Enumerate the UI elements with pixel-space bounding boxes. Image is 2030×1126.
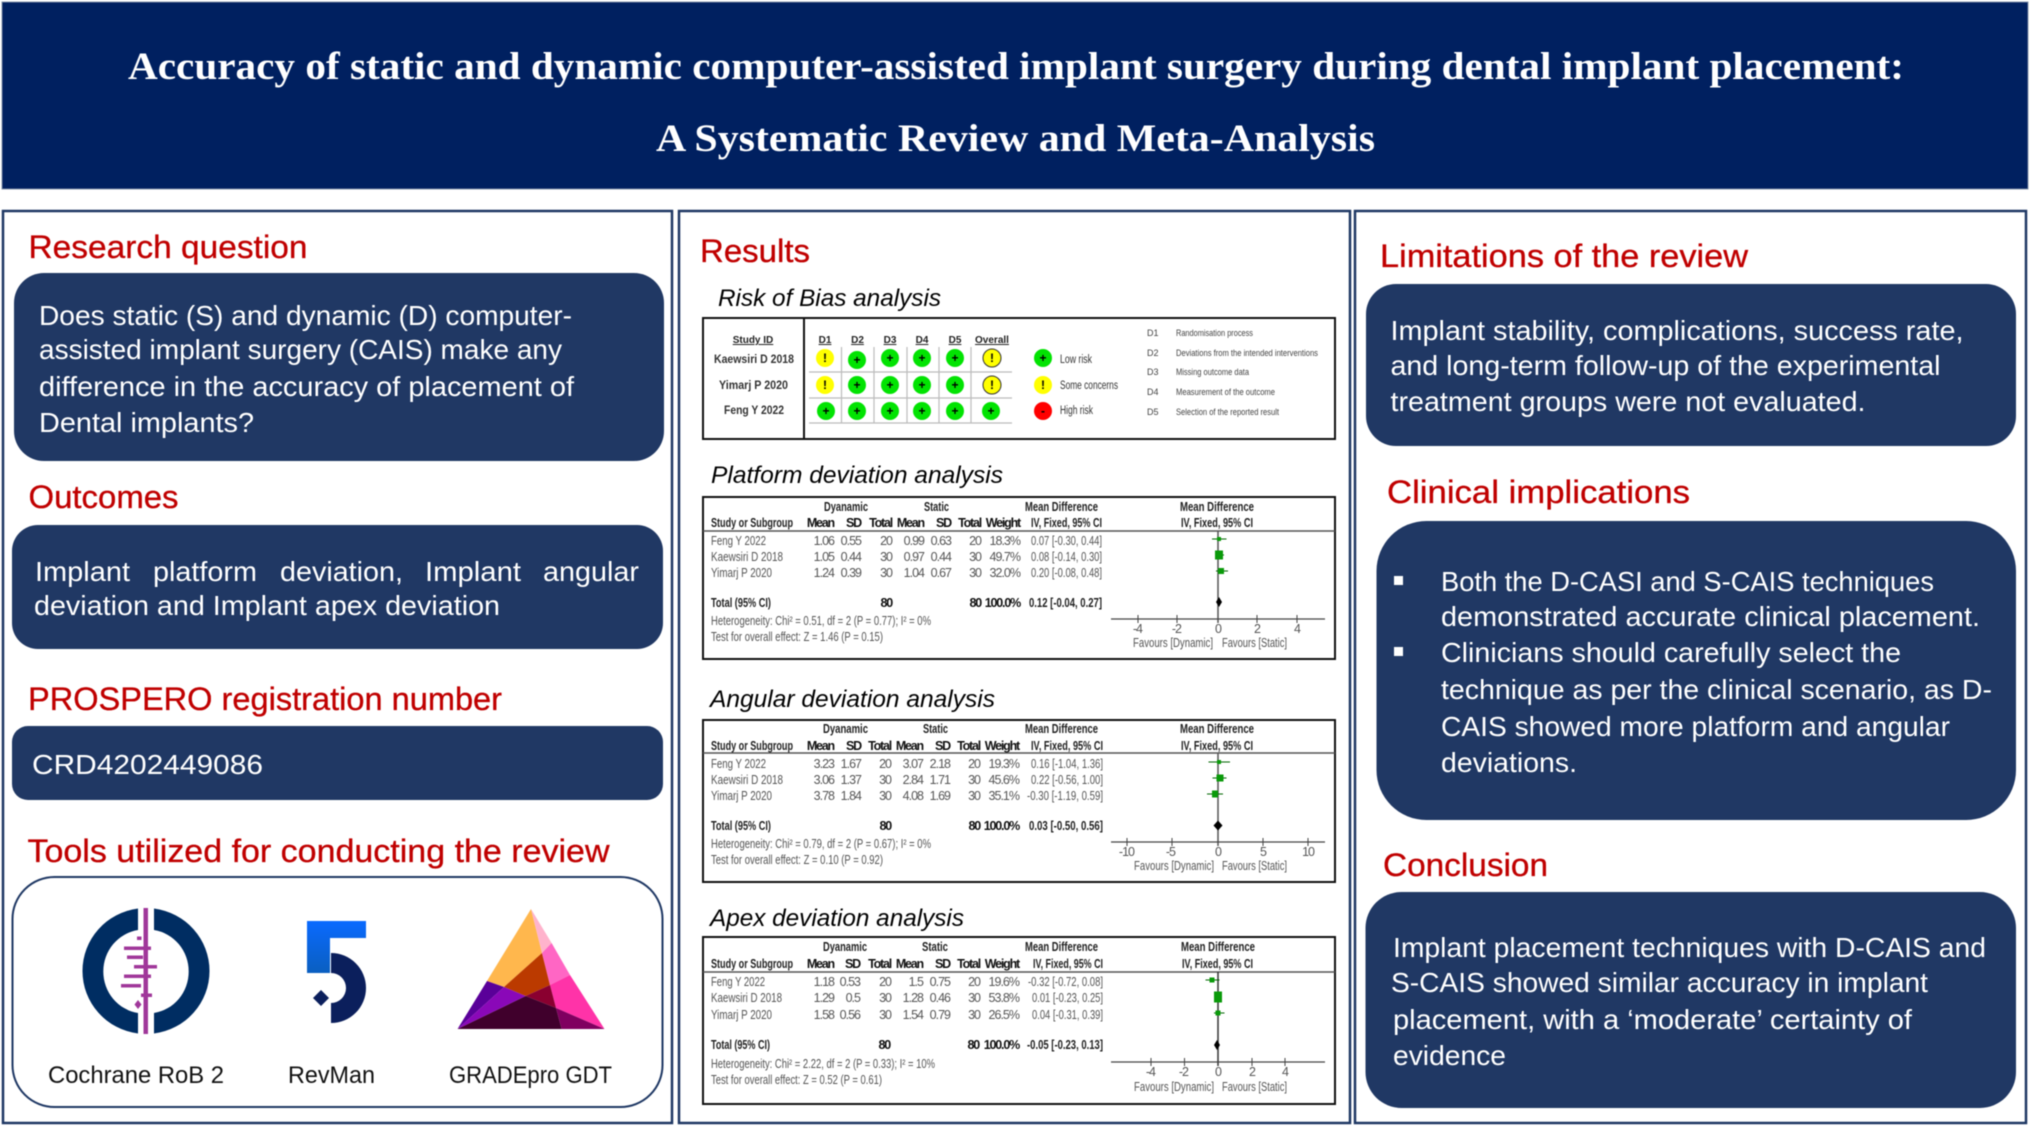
table rows: 1.71	[930, 773, 951, 787]
risk of bias chart: D2	[851, 335, 864, 346]
risk of bias: kaewsiri row: !	[990, 351, 994, 365]
table header: Static	[922, 940, 948, 954]
table rows: 20	[968, 975, 981, 989]
outcomes box: deviation and Implant apex deviation	[34, 590, 500, 621]
table header	[711, 940, 1255, 971]
limitations box	[1366, 284, 2016, 446]
domain legend: Randomisation process	[1176, 328, 1253, 338]
plot: Favours [Dynamic]	[1134, 1080, 1214, 1094]
risk of bias: feng row: +	[886, 404, 894, 418]
table header: Total	[958, 516, 982, 530]
table rows: 0.97	[904, 550, 925, 564]
conclusion box: Implant placement techniques with D-CAIS and	[1393, 932, 1986, 963]
title line 1: Accuracy of static and dynamic computer-assisted implant surgery during dental implant placement:	[128, 45, 1904, 88]
table rows: 1.28	[903, 991, 924, 1005]
table rows: Yimarj P 2020	[711, 1008, 772, 1022]
table rows: 80	[967, 1038, 980, 1052]
heading: outcomes: Outcomes	[28, 479, 178, 515]
domain legend: D4	[1147, 387, 1159, 397]
risk legend: -	[1041, 404, 1045, 418]
table rows: 32.0%	[990, 566, 1021, 580]
table rows: 1.54	[903, 1008, 924, 1022]
table rows: 19.6%	[989, 975, 1020, 989]
header banner	[2, 2, 2028, 189]
table rows: 0.07 [-0.30, 0.44]	[1031, 534, 1102, 548]
table header: Dyanamic	[823, 722, 868, 736]
table rows: 0.63	[931, 534, 952, 548]
table rows: Kaewsiri D 2018	[711, 991, 782, 1005]
table rows: 3.06	[814, 773, 835, 787]
table header: Mean Difference	[1025, 940, 1098, 954]
table header: Total	[957, 739, 981, 753]
bullet 1: Both the D-CASI and S-CAIS techniques	[1441, 566, 1934, 597]
table header: SD	[846, 516, 862, 530]
plot: 0	[1215, 622, 1222, 636]
table rows: Feng Y 2022	[711, 975, 765, 989]
risk of bias: yimarj row: !	[823, 378, 827, 392]
table rows: 1.58	[814, 1008, 835, 1022]
table rows: 30	[880, 550, 893, 564]
outcomes box: Implant	[425, 556, 521, 587]
domain legend: D5	[1147, 407, 1159, 417]
risk legend: Some concerns	[1060, 380, 1118, 392]
plot: Favours [Dynamic]	[1134, 859, 1214, 873]
domain legend: Deviations from the intended interventions	[1176, 348, 1318, 358]
table rows: Heterogeneity: Chi² = 0.51, df = 2 (P = 0.77); I² = 0%	[711, 614, 931, 628]
table rows: 30	[968, 991, 981, 1005]
table rows: Yimarj P 2020	[711, 566, 772, 580]
table rows	[711, 757, 1103, 867]
table header: Total	[868, 957, 892, 971]
table rows: 0.46	[930, 991, 951, 1005]
panel: left column	[3, 211, 672, 1123]
plot: Favours [Dynamic]	[1133, 636, 1213, 650]
forest plot: platform deviation	[703, 497, 1335, 659]
heading: research question: Research question	[28, 229, 308, 265]
table rows: 1.84	[841, 789, 862, 803]
table rows: Kaewsiri D 2018	[711, 550, 783, 564]
table rows: 0.44	[931, 550, 952, 564]
risk legend	[1034, 349, 1118, 420]
research question box: assisted implant surgery (CAIS) make any	[39, 334, 562, 365]
table header: Study or Subgroup	[711, 957, 793, 971]
table header: Mean	[896, 957, 924, 971]
risk of bias: yimarj row: +	[918, 378, 926, 392]
table rows: 45.6%	[989, 773, 1020, 787]
risk of bias: yimarj row: !	[990, 378, 994, 392]
limitations box: and long-term follow-up of the experimental	[1390, 350, 1940, 381]
risk of bias: kaewsiri row: +	[886, 351, 894, 365]
table header: IV, Fixed, 95% CI	[1181, 516, 1253, 530]
tools box	[12, 877, 662, 1107]
panel: results	[679, 211, 1350, 1123]
table rows: 4.08	[903, 789, 924, 803]
table header: SD	[845, 957, 861, 971]
risk of bias: feng row: +	[853, 404, 861, 418]
plot: 4	[1282, 1065, 1289, 1079]
table header: Mean	[807, 516, 835, 530]
bullet 1: demonstrated accurate clinical placement.	[1441, 601, 1980, 632]
outcomes box: Implant	[35, 556, 130, 587]
table rows: 30	[879, 1008, 892, 1022]
risk of bias: yimarj row: +	[886, 378, 894, 392]
bullet 2: technique as per the clinical scenario, as D-	[1441, 674, 1992, 705]
icon: cochrane rob 2 logo	[82, 908, 210, 1034]
table header: Mean Difference	[1181, 940, 1255, 954]
risk of bias chart: D5	[949, 335, 962, 346]
research question box: difference in the accuracy of placement of	[39, 371, 574, 402]
table rows: 80	[968, 819, 981, 833]
risk legend: +	[1039, 351, 1047, 365]
table rows: 35.1%	[989, 789, 1020, 803]
plot: -5	[1166, 845, 1176, 859]
label: gradepro gdt: GRADEpro GDT	[449, 1062, 612, 1089]
research question box: Dental implants?	[39, 407, 254, 438]
subheading: apex deviation: Apex deviation analysis	[708, 905, 964, 932]
table header: Total	[869, 516, 893, 530]
subheading: risk of bias: Risk of Bias analysis	[718, 285, 941, 312]
table rows: 80	[879, 819, 892, 833]
table rows: 0.16 [-1.04, 1.36]	[1031, 757, 1103, 771]
outcomes box: platform	[153, 556, 257, 587]
table rows: 30	[968, 789, 981, 803]
subheading: angular deviation: Angular deviation analysis	[708, 686, 995, 713]
table rows: 20	[880, 534, 893, 548]
table rows: -0.32 [-0.72, 0.08]	[1028, 975, 1103, 989]
table header: Static	[924, 500, 949, 514]
table rows: 1.18	[814, 975, 835, 989]
risk of bias: kaewsiri row: +	[918, 351, 926, 365]
heading: prospero: PROSPERO registration number	[28, 681, 502, 717]
risk of bias: yimarj row: +	[853, 378, 861, 392]
table header: IV, Fixed, 95% CI	[1182, 957, 1253, 971]
risk of bias: feng row: +	[822, 404, 830, 418]
risk of bias: kaewsiri row: +	[853, 353, 861, 367]
table rows: 100.0%	[985, 596, 1021, 610]
subheading: platform deviation: Platform deviation analysis	[711, 462, 1003, 489]
risk of bias chart: Study ID	[733, 335, 773, 346]
conclusion box: S-CAIS showed similar accuracy in implant	[1391, 967, 1928, 998]
table rows: 0.12 [-0.04, 0.27]	[1029, 596, 1102, 610]
plot: -4	[1146, 1065, 1156, 1079]
table rows: Test for overall effect: Z = 1.46 (P = 0.15)	[711, 630, 883, 644]
table header: Dyanamic	[823, 940, 867, 954]
table header	[711, 500, 1254, 530]
plot	[1111, 972, 1325, 1094]
prospero number box	[12, 726, 663, 800]
table rows: 26.5%	[989, 1008, 1020, 1022]
risk of bias: kaewsiri row	[816, 349, 1001, 369]
plot: Favours [Static]	[1222, 1080, 1287, 1094]
outcomes box: angular	[543, 556, 639, 587]
table rows: Test for overall effect: Z = 0.52 (P = 0.61)	[711, 1073, 882, 1087]
table header: Weight	[985, 739, 1021, 753]
table rows: 0.79	[930, 1008, 951, 1022]
table rows: 20	[879, 975, 892, 989]
table rows: 80	[880, 596, 893, 610]
outcomes box	[12, 525, 663, 649]
domain legend: Selection of the reported result	[1176, 407, 1279, 417]
table rows: Feng Y 2022	[711, 534, 766, 548]
table rows: 30	[880, 566, 893, 580]
table rows: 1.06	[814, 534, 835, 548]
risk of bias chart: Overall	[975, 335, 1009, 346]
table header: SD	[846, 739, 862, 753]
research question box: Does static (S) and dynamic (D) computer-	[39, 300, 572, 331]
table header: IV, Fixed, 95% CI	[1033, 957, 1103, 971]
label: revman: RevMan	[288, 1062, 375, 1089]
risk of bias chart	[703, 318, 1335, 439]
table rows: -0.05 [-0.23, 0.13]	[1027, 1038, 1103, 1052]
table rows: 3.07	[903, 757, 924, 771]
table header: Study or Subgroup	[711, 516, 793, 530]
table rows: 1.69	[930, 789, 951, 803]
forest plot: apex deviation	[703, 937, 1335, 1104]
heading: tools: Tools utilized for conducting the review	[28, 833, 610, 869]
table rows: 1.37	[841, 773, 862, 787]
research question box	[14, 273, 664, 461]
plot: Favours [Static]	[1222, 636, 1287, 650]
table rows: 0.55	[841, 534, 862, 548]
table rows: 1.5	[909, 975, 924, 989]
table rows: 1.24	[814, 566, 835, 580]
bullet 2: deviations.	[1441, 747, 1577, 778]
plot: -2	[1179, 1065, 1189, 1079]
table rows: 20	[968, 757, 981, 771]
table header: Mean Difference	[1180, 500, 1254, 514]
table header: Mean Difference	[1025, 500, 1098, 514]
domain legend: D1	[1147, 328, 1159, 338]
table rows: Total (95% CI)	[711, 596, 771, 610]
heading: clinical implications: Clinical implications	[1387, 474, 1690, 510]
plot: -2	[1172, 622, 1182, 636]
forest plot: angular deviation	[703, 720, 1335, 882]
table header: SD	[936, 516, 952, 530]
table header: Mean	[807, 739, 835, 753]
plot: 0	[1215, 1065, 1222, 1079]
risk of bias chart: D1	[819, 335, 832, 346]
table rows: 80	[878, 1038, 891, 1052]
table rows: 18.3%	[990, 534, 1021, 548]
table header: SD	[935, 739, 951, 753]
risk of bias: kaewsiri row: +	[951, 351, 959, 365]
table header: Total	[868, 739, 892, 753]
plot	[1111, 531, 1325, 650]
table rows: 0.22 [-0.56, 1.00]	[1031, 773, 1103, 787]
plot: 10	[1302, 845, 1315, 859]
table rows: 100.0%	[984, 1038, 1020, 1052]
bullet 1	[1394, 566, 1980, 632]
risk of bias chart: D4	[916, 335, 929, 346]
icon: revman logo	[307, 921, 366, 1023]
clinical implications box	[1376, 521, 2016, 820]
table rows: 49.7%	[990, 550, 1021, 564]
risk legend: !	[1041, 378, 1045, 392]
risk of bias: feng row: +	[987, 404, 995, 418]
label: cochrane rob 2: Cochrane RoB 2	[48, 1062, 224, 1089]
domain legend: D3	[1147, 367, 1159, 377]
table rows: 20	[879, 757, 892, 771]
plot: 0	[1215, 845, 1222, 859]
table rows: Kaewsiri D 2018	[711, 773, 783, 787]
table rows: 1.04	[904, 566, 925, 580]
table rows: Total (95% CI)	[711, 1038, 770, 1052]
table rows: 19.3%	[989, 757, 1020, 771]
domain legend: Measurement of the outcome	[1176, 387, 1275, 397]
table rows: Yimarj P 2020	[711, 789, 772, 803]
table header: Weight	[986, 516, 1022, 530]
risk of bias chart: Feng Y 2022	[724, 405, 784, 417]
table header: SD	[935, 957, 951, 971]
table rows: 30	[968, 1008, 981, 1022]
outcomes box: deviation,	[280, 556, 403, 587]
table rows: 0.03 [-0.50, 0.56]	[1029, 819, 1103, 833]
table header: Mean Difference	[1180, 722, 1254, 736]
risk of bias: kaewsiri row: !	[823, 351, 827, 365]
domain legend	[1147, 328, 1318, 417]
table rows: 53.8%	[989, 991, 1020, 1005]
conclusion box	[1366, 892, 2016, 1108]
icon: gradepro triangle logo	[458, 909, 604, 1029]
plot: -4	[1133, 622, 1143, 636]
table rows: 0.53	[840, 975, 861, 989]
heading: conclusion: Conclusion	[1383, 847, 1548, 883]
table header: Static	[923, 722, 948, 736]
table header: Mean	[897, 516, 925, 530]
table rows: 80	[969, 596, 982, 610]
table rows: 30	[969, 566, 982, 580]
plot: Favours [Static]	[1222, 859, 1287, 873]
table header: IV, Fixed, 95% CI	[1031, 516, 1102, 530]
risk of bias: feng row	[817, 402, 1000, 420]
risk of bias: feng row: +	[918, 404, 926, 418]
table rows: 100.0%	[984, 819, 1020, 833]
table rows: 30	[969, 550, 982, 564]
title line 2: A Systematic Review and Meta-Analysis	[656, 117, 1375, 160]
table rows: 1.29	[814, 991, 835, 1005]
table header: Dyanamic	[824, 500, 868, 514]
table rows: 3.78	[814, 789, 835, 803]
limitations box: treatment groups were not evaluated.	[1390, 386, 1866, 417]
table rows: 3.23	[814, 757, 835, 771]
table rows: -0.30 [-1.19, 0.59]	[1027, 789, 1103, 803]
table header: IV, Fixed, 95% CI	[1031, 739, 1103, 753]
table rows: Heterogeneity: Chi² = 2.22, df = 2 (P = 0.33); I² = 10%	[711, 1057, 935, 1071]
table header: Mean Difference	[1025, 722, 1098, 736]
table rows: 0.75	[930, 975, 951, 989]
risk of bias chart: D3	[884, 335, 897, 346]
table rows: 30	[968, 773, 981, 787]
table rows: 0.99	[904, 534, 925, 548]
table rows: 2.84	[903, 773, 924, 787]
table header: Mean	[896, 739, 924, 753]
table rows: 30	[879, 991, 892, 1005]
table rows: 2.18	[930, 757, 951, 771]
bullet 2: Clinicians should carefully select the	[1441, 637, 1901, 668]
table rows: 1.05	[814, 550, 835, 564]
table header: Mean	[807, 957, 835, 971]
table rows: 30	[879, 773, 892, 787]
plot: 4	[1294, 622, 1301, 636]
risk of bias chart: Kaewsiri D 2018	[714, 354, 795, 366]
table rows: 30	[879, 789, 892, 803]
conclusion box: evidence	[1393, 1040, 1506, 1071]
table rows: Heterogeneity: Chi² = 0.79, df = 2 (P = 0.67); I² = 0%	[711, 837, 931, 851]
table header: IV, Fixed, 95% CI	[1181, 739, 1253, 753]
plot	[1111, 753, 1325, 873]
bullet 2: CAIS showed more platform and angular	[1441, 711, 1950, 742]
plot: 2	[1254, 622, 1261, 636]
risk of bias: yimarj row: +	[951, 378, 959, 392]
heading: limitations: Limitations of the review	[1380, 238, 1749, 274]
risk legend: Low risk	[1060, 354, 1092, 366]
table header: Study or Subgroup	[711, 739, 793, 753]
risk of bias: yimarj row	[816, 376, 1001, 394]
table rows: Total (95% CI)	[711, 819, 771, 833]
table rows: 0.5	[846, 991, 861, 1005]
conclusion box: placement, with a ‘moderate’ certainty of	[1393, 1004, 1912, 1035]
limitations box: Implant stability, complications, success rate,	[1390, 315, 1964, 346]
table rows: 0.01 [-0.23, 0.25]	[1032, 991, 1103, 1005]
table rows: 20	[969, 534, 982, 548]
table rows: 0.44	[841, 550, 862, 564]
table header: Weight	[985, 957, 1021, 971]
table rows: 0.39	[841, 566, 862, 580]
table rows: 0.67	[931, 566, 952, 580]
risk of bias: feng row: +	[951, 404, 959, 418]
table rows: Feng Y 2022	[711, 757, 766, 771]
table rows	[711, 534, 1102, 644]
plot: -10	[1119, 845, 1135, 859]
risk of bias chart: Yimarj P 2020	[719, 380, 788, 392]
risk legend: High risk	[1060, 405, 1093, 417]
panel: right column	[1355, 211, 2026, 1123]
table header: Total	[957, 957, 981, 971]
table rows: 0.56	[840, 1008, 861, 1022]
prospero number box: CRD4202449086	[32, 749, 263, 780]
table rows: 0.20 [-0.08, 0.48]	[1031, 566, 1102, 580]
plot: 2	[1249, 1065, 1256, 1079]
table rows: 0.04 [-0.31, 0.39]	[1032, 1008, 1103, 1022]
domain legend: D2	[1147, 348, 1159, 358]
table header	[711, 722, 1254, 753]
table rows: Test for overall effect: Z = 0.10 (P = 0.92)	[711, 853, 883, 867]
plot: 5	[1260, 845, 1267, 859]
bullet 2	[1394, 637, 1992, 778]
table rows: 1.67	[841, 757, 862, 771]
domain legend: Missing outcome data	[1176, 367, 1249, 377]
heading: results: Results	[700, 233, 810, 269]
table rows: 0.08 [-0.14, 0.30]	[1031, 550, 1102, 564]
table rows	[711, 975, 1103, 1087]
